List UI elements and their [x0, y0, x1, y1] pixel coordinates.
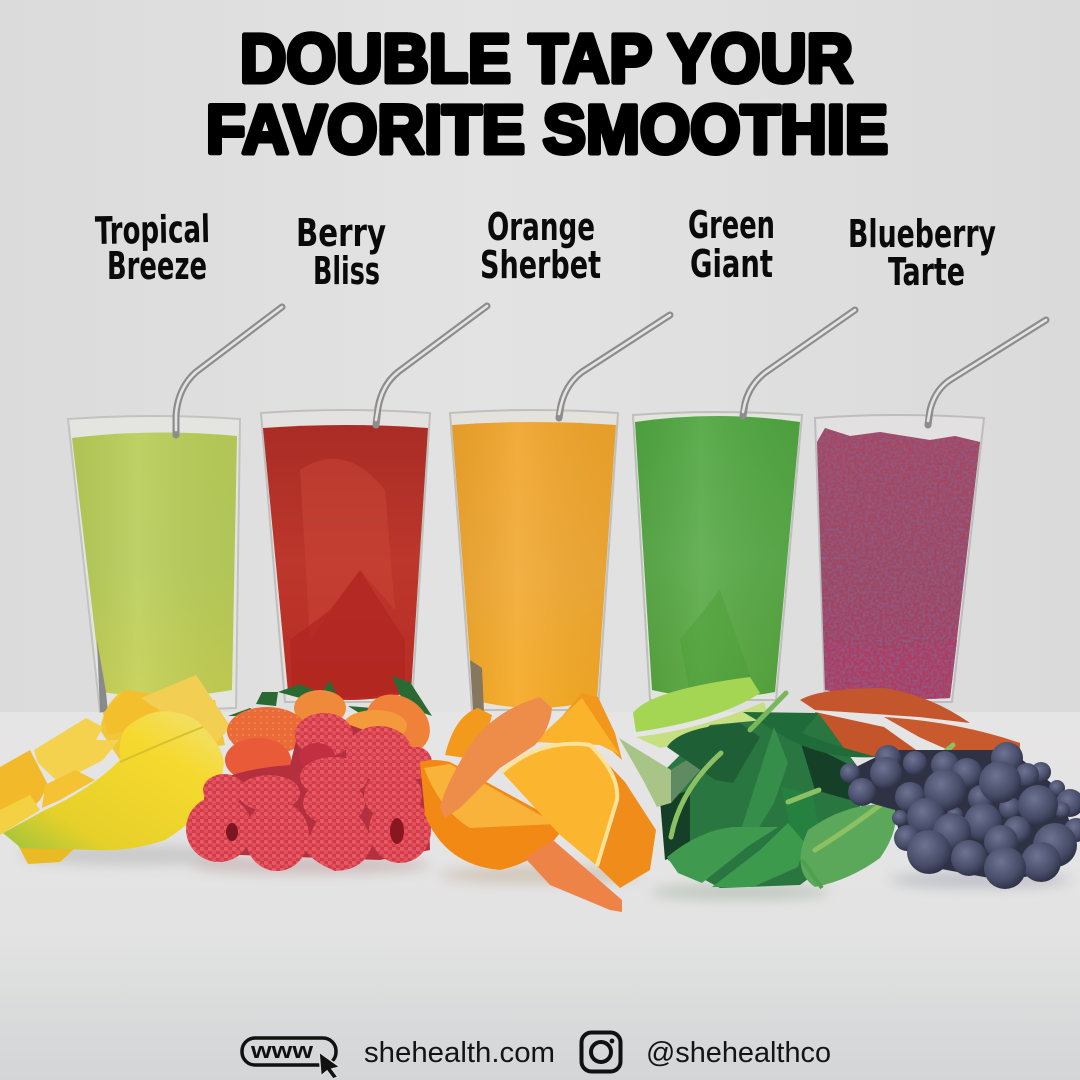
- fruit: orange slices: [420, 693, 656, 888]
- fruit: carrots: [440, 697, 622, 912]
- label: Orange Sherbet: Sherbet: [480, 243, 601, 287]
- fruit: peach slices: [800, 688, 1020, 757]
- title: FAVORITE SMOOTHIE: [206, 91, 888, 168]
- fruit: strawberries: [225, 676, 441, 782]
- label: Tropical Breeze: [95, 207, 210, 288]
- label: Berry Bliss: Berry: [296, 211, 386, 255]
- label: Orange Sherbet: [480, 205, 601, 287]
- instagram handle text: @shehealthco: [646, 1037, 831, 1069]
- food shadows on table: [20, 845, 1070, 900]
- label: Berry Bliss: [296, 211, 386, 293]
- straw: [559, 315, 670, 418]
- straw: [743, 310, 855, 416]
- label: Green Giant: Green: [688, 203, 775, 247]
- title: DOUBLE TAP YOUR: [240, 20, 853, 97]
- website text: shehealth.com: [364, 1037, 555, 1069]
- straw: [376, 306, 487, 425]
- straw: [928, 320, 1046, 425]
- icon: instagram: [582, 1032, 620, 1072]
- label: Blueberry Tarte: [848, 212, 996, 294]
- label: Tropical Breeze: Tropical: [95, 207, 210, 253]
- glass: Blueberry Tarte: [815, 320, 1046, 702]
- title: [206, 20, 888, 168]
- label: Green Giant: [688, 203, 775, 286]
- fruit: banana: [3, 711, 224, 850]
- straw: [176, 307, 282, 435]
- label: Blueberry Tarte: Tarte: [888, 250, 965, 294]
- label: Berry Bliss: Bliss: [313, 249, 380, 293]
- glass: Orange Sherbet: [450, 315, 670, 712]
- label: Blueberry Tarte: Blueberry: [848, 212, 996, 256]
- fruit: apple slices: [633, 677, 770, 748]
- fruit: blueberries: [840, 742, 1080, 889]
- icon: www cursor: www: [250, 1038, 314, 1063]
- fruit: raspberries: [186, 713, 432, 871]
- icon: www cursor: [242, 1038, 340, 1079]
- fruit: mango chunks: [0, 675, 231, 864]
- glass: Green Giant: [633, 310, 855, 700]
- footer contact bar: [242, 1032, 831, 1079]
- glass: Berry Bliss: [261, 306, 487, 702]
- vegetable: spinach: [619, 693, 953, 888]
- label: Green Giant: Giant: [690, 242, 773, 286]
- label: Orange Sherbet: Orange: [487, 205, 595, 249]
- glass: Tropical Breeze: [68, 307, 282, 712]
- label: Tropical Breeze: Breeze: [107, 244, 207, 288]
